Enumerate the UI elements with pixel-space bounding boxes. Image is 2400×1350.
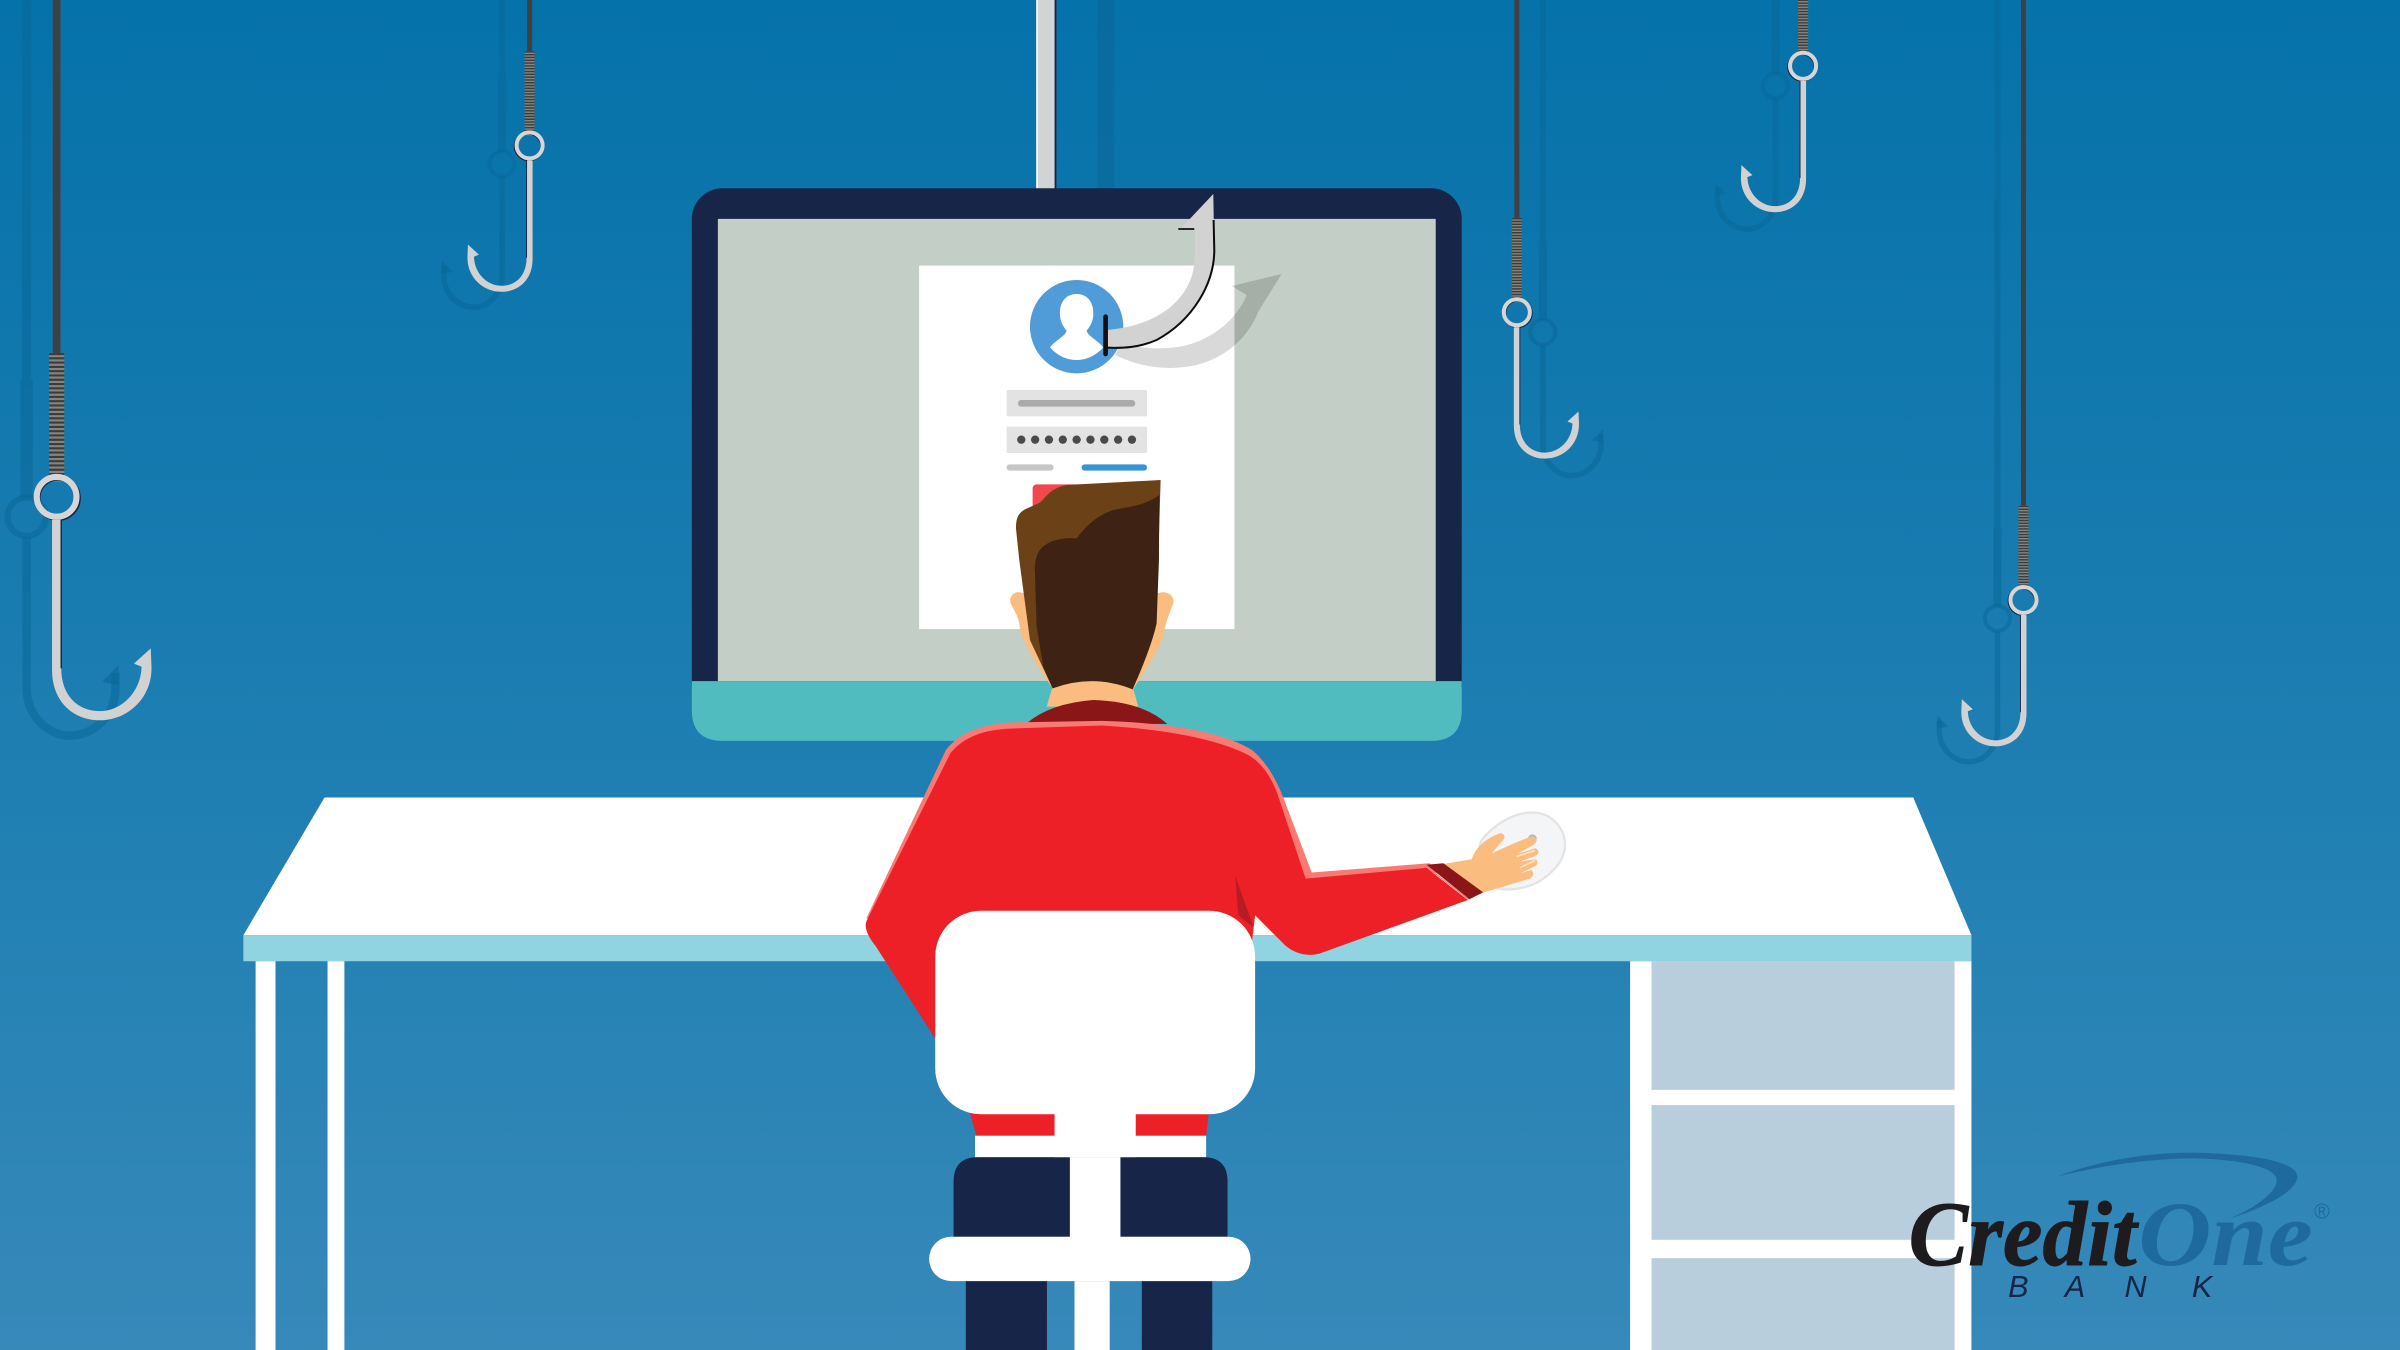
form link bars	[1007, 464, 1147, 471]
shirt collar	[1027, 700, 1167, 724]
hand	[1443, 833, 1538, 893]
lower legs	[966, 1278, 1212, 1350]
red shirt and arm	[866, 726, 1468, 1102]
icon: user avatar	[1030, 280, 1123, 373]
login form panel	[919, 266, 1234, 629]
sleeve fold	[1235, 876, 1254, 928]
logo swoosh	[2057, 1153, 2297, 1218]
monitor screen	[718, 219, 1436, 681]
logo word BANK: N	[2124, 1270, 2147, 1304]
password field	[1007, 427, 1147, 453]
logo word BANK: K	[2192, 1270, 2214, 1304]
desk drawers	[1630, 961, 1971, 1350]
chair back	[935, 911, 1255, 1114]
logo word Credit: Credit	[1909, 1183, 2139, 1285]
icon: large fish hook left	[7, 0, 152, 736]
chair base	[1074, 1281, 1110, 1350]
logo word BANK	[2008, 1270, 2214, 1304]
panel: office chair	[929, 911, 1255, 1350]
ears	[1010, 592, 1174, 690]
icon: fish hook centre right	[1504, 0, 1603, 476]
chair band	[975, 1136, 1206, 1157]
icon: hook catching the login	[1106, 194, 1214, 354]
chair seat	[929, 1237, 1251, 1281]
desk legs	[256, 961, 344, 1350]
panel: desk	[243, 797, 1971, 1350]
panel: person at desk	[866, 480, 1538, 1350]
monitor chin	[692, 681, 1462, 741]
shirt cuff	[1427, 863, 1483, 899]
icon: fish hook top right	[1715, 0, 1816, 229]
thighs	[954, 1157, 1228, 1237]
hips	[969, 1110, 1209, 1136]
icon: hook line above monitor	[1036, 0, 1114, 190]
desk top	[243, 797, 1971, 935]
computer mouse	[1479, 813, 1565, 889]
username field	[1007, 390, 1147, 416]
hair	[1016, 480, 1161, 689]
desk front edge	[243, 935, 1971, 961]
panel: computer monitor	[692, 188, 1462, 741]
logo: Credit One Bank	[1909, 1153, 2330, 1304]
login form contents	[1007, 194, 1282, 511]
icon: fish hook far right	[1937, 0, 2037, 762]
chair stem	[1070, 1157, 1120, 1240]
logo word One: One	[2138, 1183, 2313, 1285]
logo registered mark: ®	[2314, 1199, 2330, 1223]
monitor bezel	[692, 188, 1462, 716]
hook shadow on screen	[1115, 274, 1282, 368]
logo word BANK: A	[2063, 1270, 2085, 1304]
chair post	[1055, 1110, 1136, 1157]
logo word BANK: B	[2008, 1270, 2029, 1304]
icon: fish hook upper left	[442, 0, 543, 307]
neck	[1047, 663, 1138, 707]
login button	[1033, 484, 1099, 511]
shirt highlight	[866, 721, 1439, 918]
